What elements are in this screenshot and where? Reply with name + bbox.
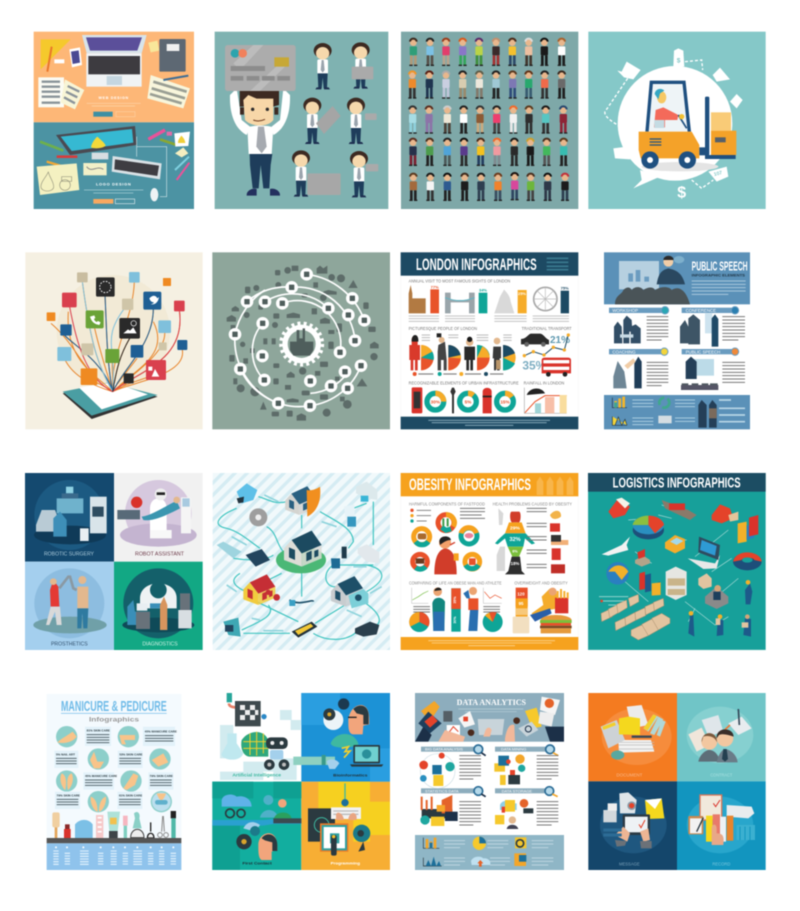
tile: obesity infographics: 35% [453,596,457,604]
tile: London infographics: 15% [500,399,511,404]
tile: forklift with logistics icons: $ [677,58,681,65]
tile: manicure and pedicure: 79% SKIN CARE [150,774,173,778]
row 1, left pair of tiles [34,32,388,209]
tile: manicure and pedicure: MANICURE & PEDICURE [61,699,167,715]
transport chart [521,333,571,377]
tile: London infographics: RAINFALL IN LONDON [524,381,565,387]
row 2, left pair of tiles [25,252,390,429]
tile: manicure and pedicure: 5% NAIL ART [56,752,75,756]
tile: manicure and pedicure: 45% MANICURE CARE [85,774,117,778]
tile: obesity infographics: 29% [510,525,521,531]
tile: crowd of cartoon characters [401,32,578,209]
tile: document, contract, message, record quartet: RECORD [712,861,731,866]
tile: London infographics: 77% [431,284,439,289]
tile: London infographics: 5% [465,399,472,404]
tile: web design and logo design: LOGO DESIGN [96,182,131,187]
tile: manicure and pedicure: 79% SKIN CARE [57,793,80,797]
tile: data analytics: DATA STORAGE [502,788,532,793]
tile: manicure and pedicure: 45% MANICURE CARE [145,729,177,733]
tile: logistics infographics [588,473,766,650]
tile: robotics quartet: PROSTHETICS [51,641,88,647]
tile: obesity infographics: OBESITY INFOGRAPHICS [409,475,531,494]
tile: forklift with logistics icons [588,32,766,209]
tile: manicure and pedicure: 53% SKIN CARE [119,752,143,756]
tile: public speech infographic elements: PUBLIC SPEECH [686,349,720,354]
row 4, right pair of tiles [415,693,766,870]
row 3, left pair of tiles [25,473,390,650]
tile: obesity infographics: 95 [519,601,524,606]
tile: robotics quartet [25,473,203,650]
tile: manicure and pedicure: 61% SKIN CARE [119,793,142,797]
transport chart: 35% [522,358,547,372]
tile: artificial intelligence quartet [212,693,390,870]
tile: businessman holding credit card [215,32,388,209]
tile: data analytics: DATA MINING [501,747,526,752]
tile: artificial intelligence quartet: Artificial Intelligence [232,772,282,777]
tile: obesity infographics [401,473,578,650]
tile: public speech infographic elements: COACHING [612,349,636,354]
tile: public speech infographic elements: WORKSHOP [612,308,638,313]
tile: smart home isometric flowchart [213,473,390,650]
tile: document, contract, message, record quartet: MESSAGE [619,861,640,866]
tile: obesity infographics: 32% [509,537,521,543]
tile: web design and logo design [34,32,194,209]
beauty products on shelf [52,811,176,838]
tile: London infographics: RECOGNIZABLE ELEMENTS OF URBAN INFRASTRUCTURE [409,381,519,387]
row 2, right pair of tiles [401,252,750,429]
tile: web design and logo design: WEB DESIGN [99,96,129,100]
tile: manicure and pedicure: Infographics [89,717,140,724]
tile: obesity infographics: 30% [453,616,457,624]
tile: data analytics: BIG DATA ANALYSIS [425,747,463,752]
tile: London infographics: 75% [561,285,569,290]
tile: obesity infographics: HEALTH PROBLEMS CAUSED BY OBESITY [493,502,572,507]
tile: public speech infographic elements: INFOGRAPHIC ELEMENTS [692,274,746,278]
tile: London infographics: TRADITIONAL TRANSPORT [522,326,572,332]
tile: public speech infographic elements [604,252,750,429]
tile: artificial intelligence quartet: Programming [331,861,361,866]
tile: manicure and pedicure [47,694,181,870]
tile: London infographics [401,252,578,429]
row 3, right pair of tiles [401,473,766,650]
tile: document, contract, message, record quartet [588,693,766,870]
tile: public speech infographic elements: CONFERENCE [686,308,716,313]
tile: mobile apps growing from a tablet [25,252,203,429]
tile: document, contract, message, record quartet: CONTRACT [710,773,732,778]
tile: London infographics: 34% [479,287,487,292]
tile: circular icon spiral with factory gear [212,252,390,429]
tile: forklift with logistics icons: 107 [713,170,723,178]
tile: artificial intelligence quartet: Bioinformatics [333,772,368,777]
tile: obesity infographics: HARMFUL COMPONENTS OF FASTFOOD [409,502,486,507]
row 4, left pair of tiles [47,693,390,870]
tile: London infographics: 30% [431,399,441,404]
tile: robotics quartet: DIAGNOSTICS [142,641,178,647]
tile: public speech infographic elements: PUBLIC SPEECH [692,260,748,274]
tile: obesity infographics: 6% [512,549,518,553]
tile: robotics quartet: ROBOT ASSISTANT [135,552,185,558]
tile: obesity infographics: COMPARING OF LIFE AN OBESE MAN AND ATHLETE [409,580,502,585]
tile: artificial intelligence quartet: First Contact [242,861,272,866]
tile: data analytics: STATISTICS DATA [425,788,459,793]
row 1, right pair of tiles [401,32,766,209]
transport chart: 21% [550,335,570,346]
tile: data analytics [415,693,564,870]
tile: London infographics: PICTURESQUE PEOPLE OF LONDON [409,326,477,332]
tile: obesity infographics: OVERWEIGHT AND OBESITY [514,580,568,585]
tile: robotics quartet: ROBOTIC SURGERY [44,552,94,558]
tile: London infographics: ANNUAL VISIT TO MOST FAMOUS SIGHTS OF LONDON [409,279,511,285]
tile: London infographics: 25% [518,291,526,296]
tile: London infographics: LONDON INFOGRAPHICS [416,255,537,274]
tile: forklift with logistics icons: $ [677,185,686,202]
londoners with pie charts [409,333,516,376]
tile: obesity infographics: 18% [511,561,519,566]
tile: data analytics: DATA ANALYTICS [457,697,526,707]
tile: manicure and pedicure: 81% SKIN CARE [87,729,110,733]
tile: document, contract, message, record quartet: DOCUMENT [616,773,642,778]
tile: obesity infographics: 120 [517,592,525,597]
